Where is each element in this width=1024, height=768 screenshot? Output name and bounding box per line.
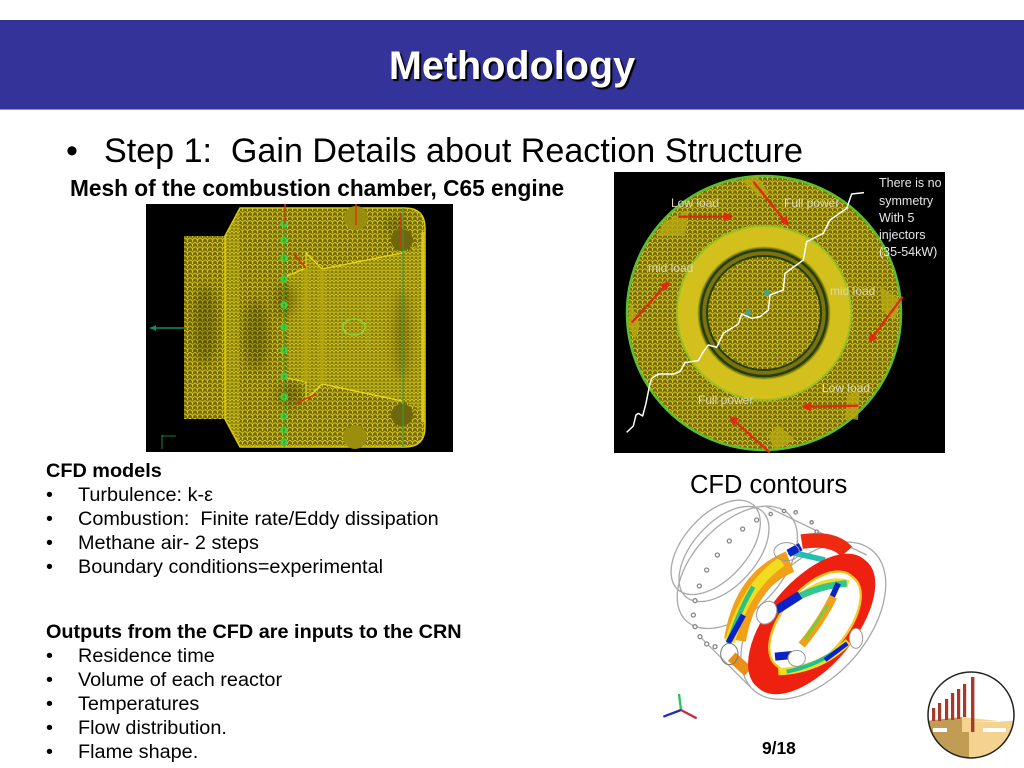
image: cross-section mesh with injector labels: Full power	[698, 393, 753, 407]
image: cross-section mesh with injector labels: mid load	[648, 261, 693, 275]
mesh caption: Mesh of the combustion chamber, C65 engine	[70, 175, 564, 201]
icon: factory logo	[927, 671, 1015, 759]
image: cross-section mesh with injector labels: Low load	[671, 196, 719, 210]
image: cross-section mesh with injector labels	[614, 172, 945, 453]
CFD outputs list: Residence time	[78, 645, 215, 667]
title banner	[0, 20, 1024, 110]
image: cross-section mesh with injector labels: With 5	[879, 211, 914, 225]
CFD outputs list: Flame shape.	[78, 741, 198, 763]
CFD models list: Boundary conditions=experimental	[78, 556, 383, 578]
step heading: •	[66, 132, 78, 170]
hole streaks	[775, 582, 848, 672]
back ring	[728, 540, 847, 672]
CFD outputs list: Outputs from the CFD are inputs to the CRN	[46, 621, 462, 643]
CFD models list	[46, 460, 439, 578]
CFD outputs list: Volume of each reactor	[78, 669, 282, 691]
image: side-view mesh of the combustion chamber	[146, 204, 453, 452]
image: cross-section mesh with injector labels: There is no	[879, 176, 942, 190]
front ring	[748, 554, 875, 694]
CFD outputs list	[46, 621, 462, 763]
CFD models list: Combustion: Finite rate/Eddy dissipation	[78, 508, 439, 530]
image: cross-section mesh with injector labels: mid load	[830, 284, 875, 298]
step heading: Step 1: Gain Details about Reaction Structure	[104, 132, 803, 170]
CFD outputs list: Temperatures	[78, 693, 199, 715]
image: cross-section mesh with injector labels: (35-54kW)	[879, 245, 937, 259]
contours caption: CFD contours	[690, 471, 847, 499]
holes	[691, 509, 818, 649]
image: cross-section mesh with injector labels: injectors	[879, 228, 926, 242]
icon: axes triad	[663, 694, 697, 718]
CFD models list: CFD models	[46, 460, 162, 482]
image: cross-section mesh with injector labels: Low load	[822, 381, 870, 395]
image: CFD contour rings	[662, 500, 886, 720]
image: cross-section mesh with injector labels: symmetry	[879, 194, 934, 208]
cylinder outline	[654, 484, 914, 726]
title: Methodology	[389, 44, 635, 88]
CFD models list: Methane air- 2 steps	[78, 532, 259, 554]
CFD outputs list: Flow distribution.	[78, 717, 227, 739]
CFD models list: Turbulence: k-ε	[78, 484, 213, 506]
injectors	[721, 543, 863, 666]
image: cross-section mesh with injector labels: Full power	[784, 196, 839, 210]
page number: 9/18	[762, 738, 796, 758]
